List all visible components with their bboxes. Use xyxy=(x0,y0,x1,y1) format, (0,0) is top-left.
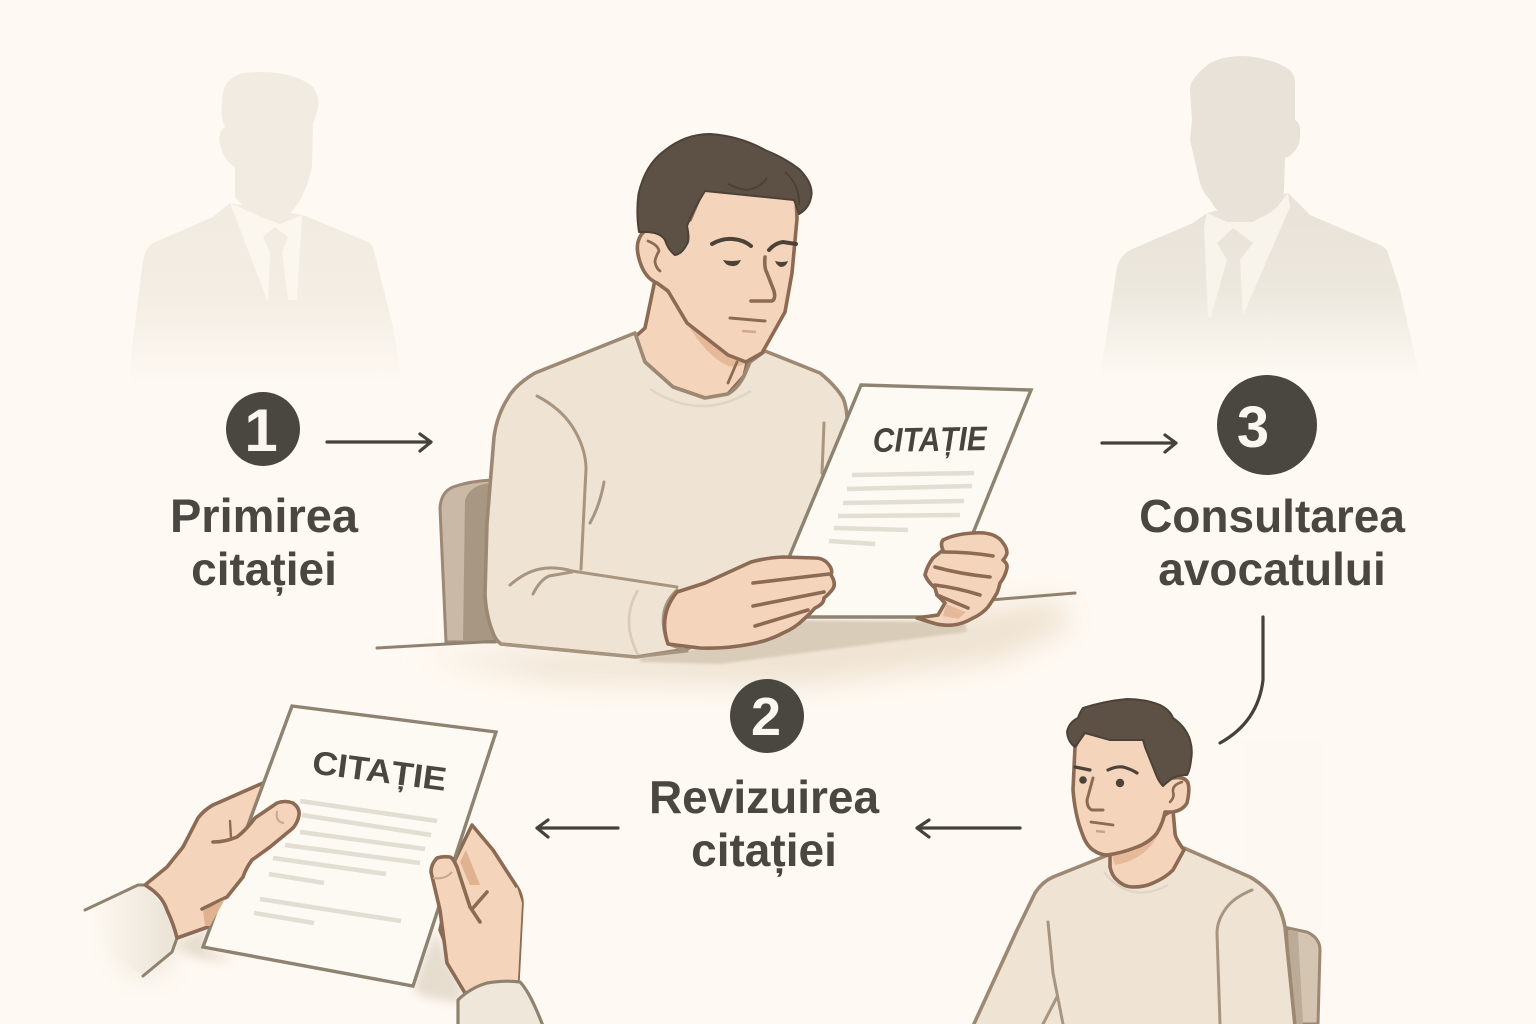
right cuff xyxy=(458,981,543,1024)
step 1 label: citației xyxy=(191,543,337,596)
left thumb xyxy=(190,802,299,909)
step 2 arrow to hands xyxy=(537,820,618,837)
sweater xyxy=(973,848,1295,1024)
step 3 number: 3 xyxy=(1237,395,1269,460)
document title: CITAȚIE xyxy=(310,743,449,798)
step 2 label: citației xyxy=(691,824,837,877)
sleeve folds xyxy=(537,396,586,569)
main figure reading the summons xyxy=(485,134,1031,657)
step 3 number xyxy=(1217,375,1317,475)
ear detail xyxy=(1170,782,1182,802)
step 3 label: Consultarea xyxy=(1139,490,1405,542)
right hand back xyxy=(440,825,522,993)
faint backdrop patch xyxy=(1242,740,1322,930)
closed eyes xyxy=(723,260,741,266)
brows xyxy=(1075,767,1137,773)
chair: main figure xyxy=(440,480,495,642)
step 1 label: Primirea xyxy=(170,489,359,542)
neck xyxy=(1110,810,1184,887)
neck xyxy=(635,280,749,398)
sheet text lines xyxy=(829,473,974,544)
neck shadow xyxy=(687,323,749,366)
connector curve xyxy=(1220,617,1263,743)
chair xyxy=(1288,928,1320,1024)
right hand xyxy=(917,533,1007,625)
silhouette: left lawyer xyxy=(130,72,403,385)
table edge xyxy=(377,593,1075,648)
lower right client figure xyxy=(973,699,1320,1024)
head xyxy=(637,185,797,362)
document text lines xyxy=(254,801,437,923)
step 2 number xyxy=(730,679,804,753)
nose xyxy=(751,257,775,301)
cuff xyxy=(663,590,677,644)
left hand xyxy=(665,557,834,648)
step 2 number: 2 xyxy=(751,687,781,747)
sweater torso xyxy=(485,333,860,657)
right thumb xyxy=(431,857,522,993)
step 3 arrow xyxy=(1102,435,1176,452)
summons sheet xyxy=(790,385,1031,617)
step 2 arrow from lawyer xyxy=(917,820,1020,837)
step 1 number: 1 xyxy=(244,397,278,464)
soft shadows xyxy=(172,926,235,962)
mouth xyxy=(730,318,765,321)
left sleeve xyxy=(85,885,177,976)
nose xyxy=(1087,778,1103,810)
step 2 label: Revizuirea xyxy=(649,771,879,823)
step 1 number xyxy=(226,392,300,466)
head xyxy=(1073,728,1189,855)
document xyxy=(203,706,496,986)
collar ribbing xyxy=(650,389,751,406)
left hand back xyxy=(145,783,263,938)
lower left hands holding summons xyxy=(85,706,543,1024)
table shading xyxy=(420,600,1072,685)
mouth xyxy=(1091,822,1113,825)
silhouette: right lawyer xyxy=(1100,56,1420,378)
hair xyxy=(1067,699,1192,786)
brows xyxy=(712,239,751,246)
step 3 label: avocatului xyxy=(1158,543,1386,595)
ear detail xyxy=(648,241,660,271)
sheet title: CITAȚIE xyxy=(872,420,988,460)
step 1 arrow xyxy=(327,434,431,451)
eyes xyxy=(1079,776,1087,784)
hair xyxy=(637,134,812,255)
